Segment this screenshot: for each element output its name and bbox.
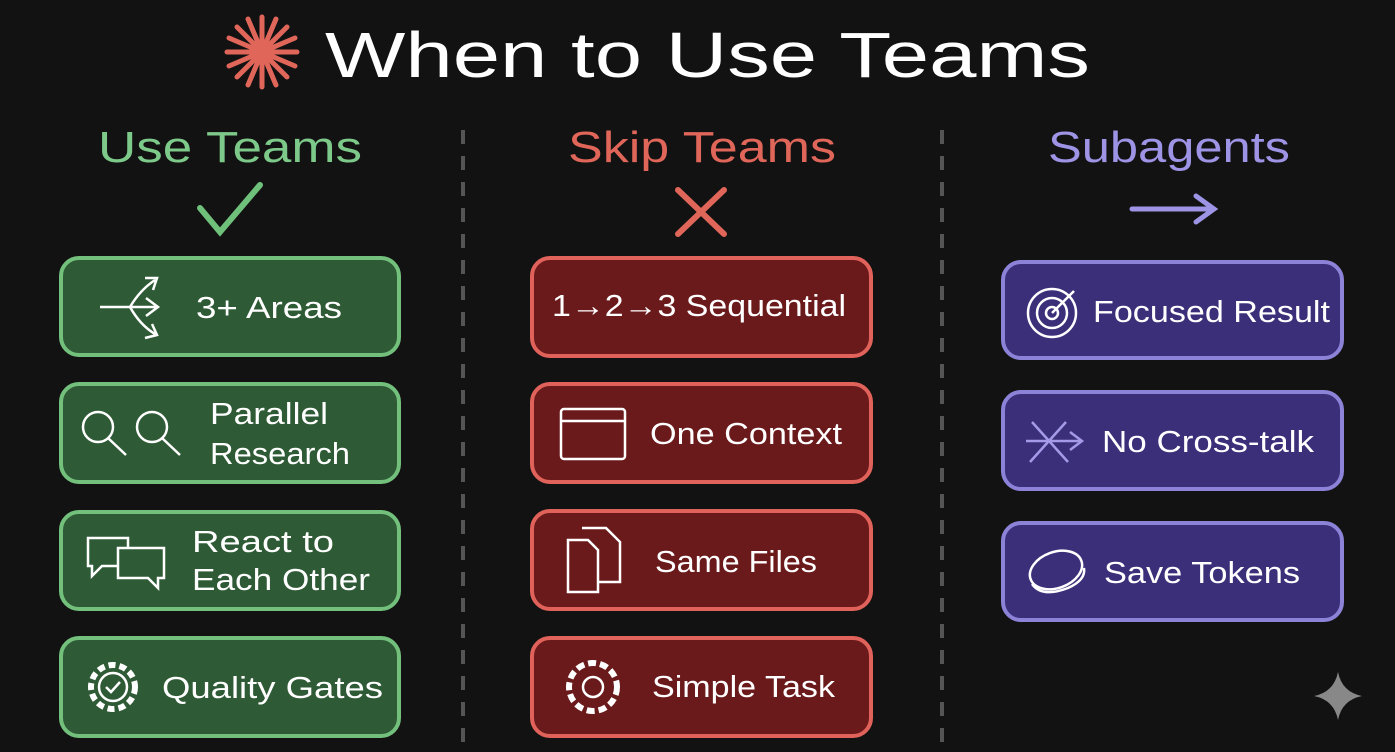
panel: skip teams xyxy=(532,258,871,736)
card: React to Each Other: Each Other xyxy=(192,562,370,597)
card: Focused Result xyxy=(1003,262,1342,358)
card: Simple Task xyxy=(532,638,871,736)
card: React to Each Other: React to xyxy=(192,524,334,559)
panel: use teams xyxy=(61,258,399,736)
card: No Cross-talk xyxy=(1003,392,1342,489)
heading: Use Teams xyxy=(98,123,362,232)
icon: arrow xyxy=(1132,196,1214,222)
card: Save Tokens xyxy=(1003,523,1342,620)
title xyxy=(227,17,1090,91)
dividers xyxy=(463,130,942,745)
card: Sequential xyxy=(532,258,871,356)
card: Same Files: Same Files xyxy=(655,544,817,579)
card: Sequential: 1→2→3 Sequential xyxy=(552,288,846,323)
card: Save Tokens: Save Tokens xyxy=(1104,555,1300,590)
card: 3+ Areas xyxy=(61,258,399,355)
panel: subagents xyxy=(1003,262,1342,620)
heading: Subagents: Subagents xyxy=(1048,123,1290,172)
heading: Skip Teams xyxy=(568,123,836,234)
card: 3+ Areas: 3+ Areas xyxy=(196,290,342,325)
card: Quality Gates xyxy=(61,638,399,736)
heading: Subagents xyxy=(1048,123,1290,222)
card: One Context xyxy=(532,384,871,482)
card: Focused Result: Focused Result xyxy=(1093,294,1330,329)
icon: starburst xyxy=(227,17,297,87)
icon: cross xyxy=(678,190,724,234)
card: React to Each Other xyxy=(61,512,399,609)
title: When to Use Teams xyxy=(325,19,1090,91)
card: Parallel Research xyxy=(61,384,399,482)
card: Parallel Research: Parallel xyxy=(210,396,328,431)
icon: check xyxy=(200,185,260,232)
card: Parallel Research: Research xyxy=(210,436,350,471)
heading: Skip Teams: Skip Teams xyxy=(568,123,836,172)
heading: Use Teams: Use Teams xyxy=(98,123,362,172)
card: Simple Task: Simple Task xyxy=(652,669,836,704)
card: One Context: One Context xyxy=(650,416,842,451)
icon: sparkle xyxy=(1314,672,1362,720)
card: Same Files xyxy=(532,511,871,609)
card: Quality Gates: Quality Gates xyxy=(162,670,383,705)
card: No Cross-talk: No Cross-talk xyxy=(1102,424,1315,459)
